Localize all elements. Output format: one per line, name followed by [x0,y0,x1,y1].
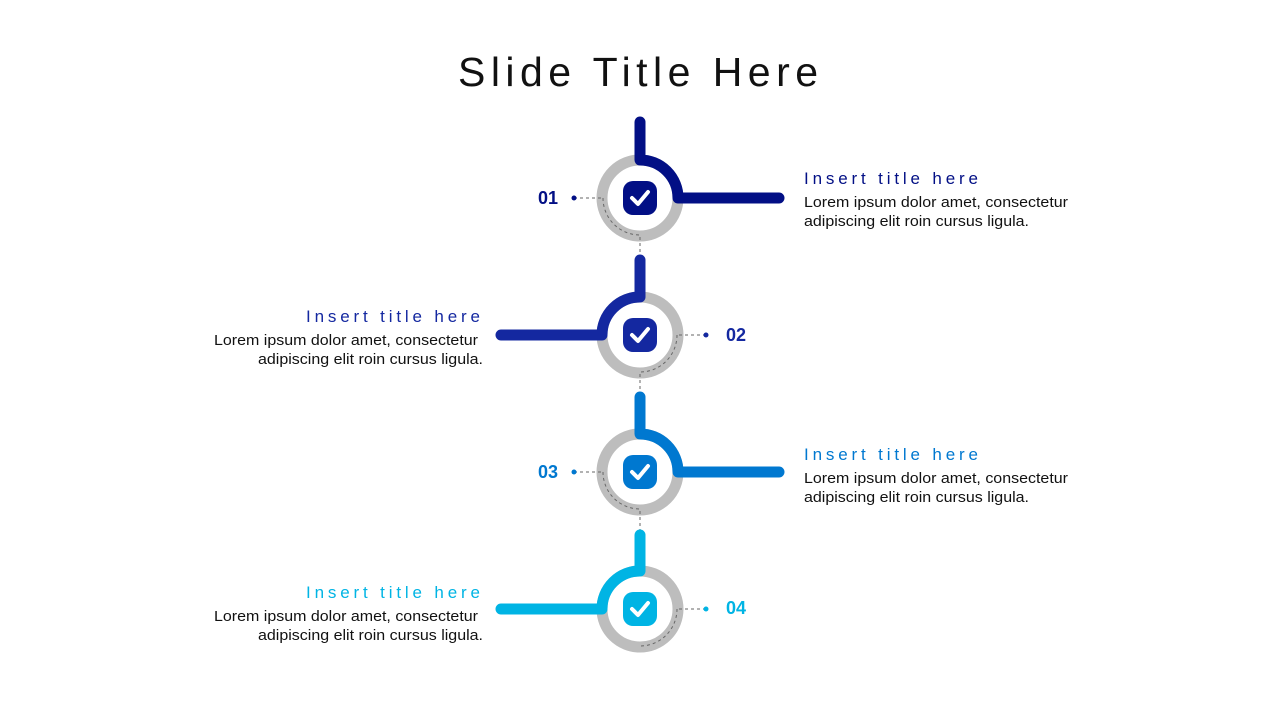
step 01: Lorem ipsum dolor amet, consectetur [804,194,1068,211]
step 02 [214,260,746,399]
step 03: 03 [538,462,558,482]
step 03 [538,397,1068,536]
step 01: Insert title here [804,169,978,188]
step 01 [538,122,1068,262]
step 02: Lorem ipsum dolor amet, consectetur [214,332,478,349]
step 01: adipiscing elit roin cursus ligula. [804,213,1029,230]
step 01: 01 [538,188,558,208]
step 02: adipiscing elit roin cursus ligula. [258,351,483,368]
step 03: Lorem ipsum dolor amet, consectetur [804,470,1068,487]
step 03: Insert title here [804,445,978,464]
step 04: Lorem ipsum dolor amet, consectetur [214,608,478,625]
step 02: 02 [726,325,746,345]
title: Slide Title Here [458,49,818,95]
step 03: adipiscing elit roin cursus ligula. [804,489,1029,506]
step 04 [214,535,746,647]
step 04: Insert title here [306,583,480,602]
step 04: adipiscing elit roin cursus ligula. [258,627,483,644]
step 02: Insert title here [306,307,480,326]
step 04: 04 [726,598,746,618]
